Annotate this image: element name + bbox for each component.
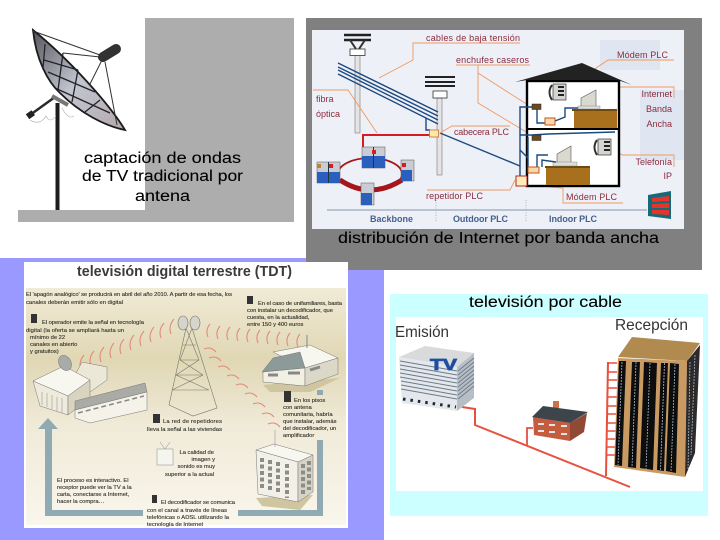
emitting building bbox=[33, 353, 147, 423]
TV tower bbox=[169, 316, 217, 416]
diagram labels: enchufes caseros bbox=[456, 55, 530, 65]
caption: antena bbox=[82, 150, 243, 205]
text: picture quality: sonido es muy bbox=[178, 464, 215, 470]
label: Recepción: Recepción bbox=[615, 317, 688, 334]
text: step 4 bbox=[147, 500, 236, 528]
diagram labels: repetidor PLC bbox=[426, 191, 484, 201]
caption: antena: captación de ondas bbox=[84, 150, 241, 167]
panel: Internet por banda ancha bbox=[306, 18, 702, 270]
text: step 3 bbox=[247, 301, 343, 328]
small brick house bbox=[532, 401, 588, 441]
text: interactive: carta, conectarse a Internet, bbox=[57, 492, 130, 498]
text: picture quality: La calidad de bbox=[180, 450, 214, 456]
panel: TDT background bbox=[0, 258, 384, 540]
diagram labels: fibra bbox=[316, 94, 334, 104]
text: step 1: y gratuitos) bbox=[30, 349, 59, 355]
text: step 1: El operador emite la señal en tecnología bbox=[42, 320, 145, 326]
cables bbox=[462, 362, 630, 487]
diagram labels: Indoor PLC bbox=[549, 214, 598, 224]
diagram labels: Módem PLC bbox=[617, 50, 668, 60]
text: introduction: canales deberán emitir sólo en digital bbox=[26, 300, 123, 306]
apartment tower bbox=[614, 337, 700, 477]
text: step 4: tecnología de Internet bbox=[147, 522, 203, 528]
fibre link bbox=[363, 135, 430, 147]
caption: antena: de TV tradicional por bbox=[82, 168, 243, 185]
icon: television bbox=[157, 442, 173, 465]
text: step 3: con instalar un decodificador, que bbox=[247, 308, 333, 314]
electric poles bbox=[344, 35, 455, 175]
diagram labels: Banda bbox=[646, 104, 672, 114]
panel: antena tradicional bbox=[18, 18, 294, 222]
text: interactive: El proceso es interactivo. El bbox=[57, 478, 129, 484]
family house bbox=[262, 335, 340, 392]
text: step 4: El decodificador se comunica bbox=[161, 500, 236, 506]
text: picture quality: imagen y bbox=[191, 457, 215, 463]
diagram labels: Outdoor PLC bbox=[453, 214, 508, 224]
apartment block bbox=[256, 430, 313, 510]
servers bbox=[317, 147, 414, 205]
text: picture quality bbox=[165, 450, 215, 478]
diagram labels bbox=[316, 33, 672, 224]
diagram labels: óptica bbox=[316, 109, 340, 119]
text: step 2: La red de repetidores bbox=[163, 419, 222, 425]
diagram labels: Módem PLC bbox=[566, 192, 618, 202]
text: interactive: hacer la compra… bbox=[57, 499, 105, 505]
text: picture quality: superior a la actual bbox=[165, 472, 214, 478]
panel: televisión digital terrestre bbox=[24, 262, 348, 528]
diagram: PLC network bbox=[312, 30, 684, 229]
diagram labels: Backbone bbox=[370, 214, 413, 224]
text: step 1: digital (la oferta se ampliará hasta un bbox=[26, 328, 124, 334]
logo bbox=[648, 191, 671, 219]
text: step 2 bbox=[147, 419, 222, 433]
illustration: TDT scene bbox=[33, 316, 340, 516]
text: introduction: El 'apagón analógico' se producirá en abril del año 2010. A partir de esa fecha, los bbox=[26, 292, 232, 298]
leader lines bbox=[313, 43, 674, 203]
caption: banda ancha: distribución de Internet por banda ancha bbox=[338, 230, 659, 247]
TV station building bbox=[399, 346, 474, 411]
caption: antena: antena bbox=[135, 188, 190, 205]
heading: cable: televisión por cable bbox=[469, 294, 622, 311]
text: step 3: En el caso de unifamiliares, basta bbox=[258, 301, 343, 307]
fibre ring bbox=[338, 158, 402, 190]
text: interactive: receptor puede ver la TV a la bbox=[57, 485, 132, 491]
home wiring bbox=[520, 107, 615, 176]
PLC outlets and modems bbox=[516, 104, 555, 186]
text: step 5: amplificador bbox=[283, 433, 314, 439]
diagram labels: Ancha bbox=[646, 119, 672, 129]
text: step 5: con antena bbox=[283, 405, 312, 411]
diagram labels: cables de baja tensión bbox=[426, 33, 520, 43]
text: interactive bbox=[57, 478, 132, 505]
icon: satellite dish bbox=[26, 30, 125, 210]
text: step 3: entre 150 y 400 euros bbox=[247, 322, 303, 328]
telephones bbox=[550, 84, 611, 155]
house bbox=[515, 63, 632, 186]
label: Emisión: Emisión bbox=[395, 324, 449, 341]
text: step 5: En los pisos bbox=[294, 398, 325, 404]
text: step 1: canales en abierto bbox=[30, 342, 77, 348]
low-voltage cables bbox=[338, 63, 520, 166]
illustration: cable network bbox=[399, 337, 700, 487]
heading: TDT: televisión digital terrestre (TDT) bbox=[77, 264, 292, 280]
text: introduction bbox=[26, 292, 232, 306]
text: step 2: lleva la señal a las viviendas bbox=[147, 427, 222, 433]
text: step 1: mínimo de 22 bbox=[30, 335, 65, 341]
text: step 5 bbox=[283, 398, 337, 439]
text: step 1 bbox=[26, 320, 145, 355]
diagram labels: cabecera PLC bbox=[454, 127, 510, 137]
text: step 3: cuesta, en la actualidad, bbox=[247, 315, 310, 321]
panel: televisión por cable bbox=[390, 294, 708, 516]
signal waves bbox=[80, 319, 300, 427]
station TV sign: TV bbox=[430, 357, 457, 374]
diagram labels: IP bbox=[663, 171, 672, 181]
step number boxes bbox=[31, 296, 291, 503]
diagram labels: Telefonía bbox=[635, 157, 672, 167]
text: step 5: del decodificador, un bbox=[283, 426, 336, 432]
arrow: return path bbox=[38, 418, 143, 516]
text: step 5: comunitaria, habría bbox=[283, 412, 333, 418]
text: step 5: que instalar, además bbox=[283, 419, 337, 425]
text: step 4: telefónicas o ADSL utilizando la bbox=[147, 515, 230, 521]
text: step 4: con el canal a través de líneas bbox=[147, 508, 227, 514]
diagram labels: Internet bbox=[641, 89, 672, 99]
desks and computers bbox=[545, 90, 617, 185]
